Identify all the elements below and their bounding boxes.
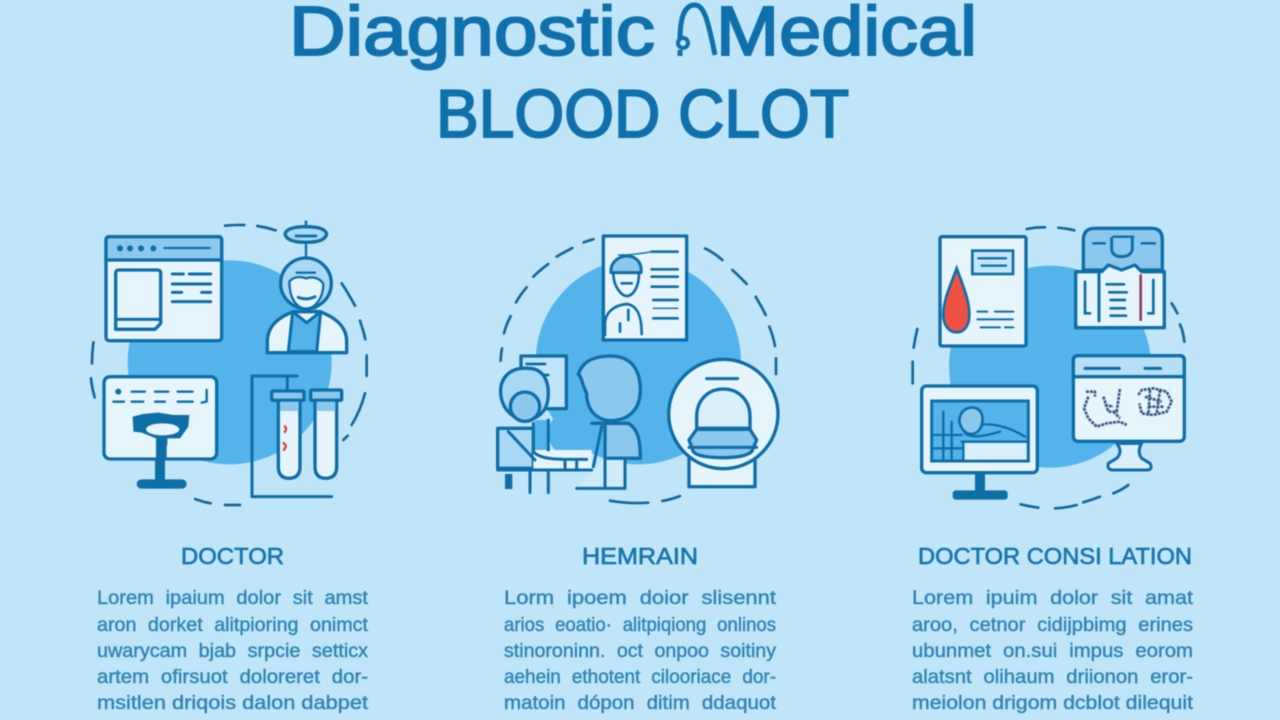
text block: hemrain description: matoin dópon ditim ddaquot	[504, 692, 777, 714]
panel: hemrain illustration	[498, 236, 778, 503]
icon: desktop with patient in bed	[922, 386, 1037, 500]
text block: doctor consilation description: Lorem ipuim dolor sit amat	[912, 587, 1194, 609]
title: BLOOD CLOT	[436, 76, 849, 152]
text block: doctor description: aron dorket alitpioring onimct	[97, 614, 369, 636]
icon: patient record document	[603, 236, 687, 340]
panel: doctor consultation illustration	[913, 227, 1184, 508]
heading: hemrain: HEMRAIN	[582, 543, 698, 569]
text block: doctor description: msitlen driqois dalon dabpet	[97, 692, 369, 714]
heading: doctor: DOCTOR	[181, 543, 284, 569]
heading: doctor consilation: DOCTOR CONSI LATION	[918, 543, 1192, 569]
blue backdrop circle	[949, 266, 1151, 468]
panel: doctor illustration	[91, 222, 367, 505]
text block: doctor consilation description: ubunmet on.sui impus eorom	[912, 640, 1193, 662]
text block: doctor description: Lorem ipaium dolor sit amst	[97, 587, 369, 609]
text block: hemrain description: stinoroninn. oct onpoo soitiny	[504, 640, 776, 662]
dashed ring	[913, 227, 1184, 508]
text block: doctor description	[97, 587, 369, 714]
text block: doctor consilation description: alatsnt olihaum driionon eror-	[912, 666, 1193, 688]
icon: browser window with book	[106, 237, 222, 341]
text block: doctor description: artem ofirsuot doloreret dor-	[97, 666, 368, 688]
text block: hemrain description: arios eoatio· alitpiqiong onlinos	[504, 614, 776, 636]
text block: doctor description: uwarycam bjab srpcie setticx	[97, 640, 368, 662]
text block: doctor consilation description: meiolon drigom dcblot dilequit	[912, 692, 1194, 714]
text block: hemrain description	[504, 587, 777, 714]
icon: blood test report	[940, 237, 1026, 346]
icon: MRI scanner	[669, 359, 778, 487]
dashed ring	[91, 225, 367, 505]
blue backdrop circle	[128, 260, 332, 464]
text block: hemrain description: Lorm ipoem doior slisennt	[504, 587, 777, 609]
icon: doctor with head mirror	[267, 222, 347, 353]
blue shoulder behind figures	[548, 409, 596, 457]
title	[289, 0, 977, 152]
text block: doctor consilation description	[912, 587, 1194, 714]
icon: test tubes on rack	[252, 376, 342, 497]
icon: clipboard with file	[1076, 228, 1164, 328]
icon: monitor with clot image	[104, 377, 217, 489]
second figure	[577, 356, 640, 488]
icon: doctor and patient consultation	[498, 356, 640, 493]
icon: stethoscope glyph in title	[678, 5, 715, 56]
text block: hemrain description: aehein ethotent cilooriace dor-	[504, 666, 776, 688]
text block: doctor consilation description: aroo, cetnor cidijpbimg erines	[912, 614, 1193, 636]
blue backdrop circle	[536, 259, 741, 464]
desk and seated figure	[498, 356, 592, 470]
dashed ring	[501, 239, 776, 503]
icon: monitor with clot chart	[1073, 356, 1184, 470]
